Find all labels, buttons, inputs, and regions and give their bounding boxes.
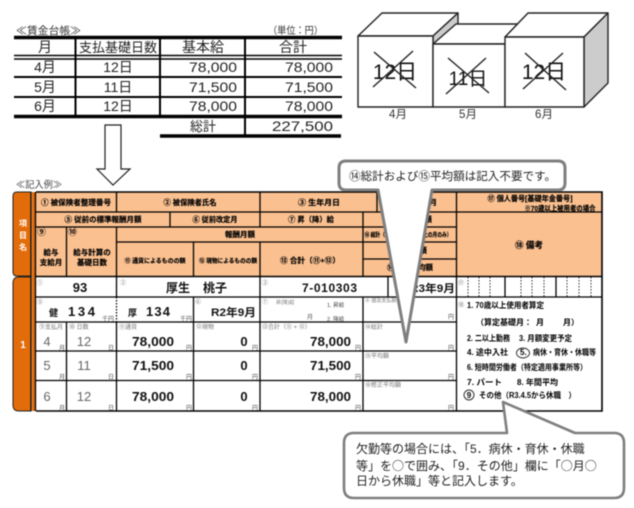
- remarks checklist: 6. 短時間労働者（特定適用事業所等）: [467, 362, 587, 372]
- caption: wage ledger: ≪賃金台帳≫: [16, 24, 81, 37]
- caption: entry example: ≪記入例≫: [16, 179, 62, 191]
- callout: absence instructions: 欠勤等の場合には、「5．病休・育休・休職: [356, 441, 585, 456]
- row values: 71,500: [132, 358, 174, 373]
- header labels: 給与: [44, 247, 59, 257]
- arrow: ledger to form: [97, 125, 130, 185]
- box: May 11 days: 11日: [449, 69, 487, 90]
- remarks checklist: 1. 70歳以上使用者算定: [467, 300, 544, 310]
- row values: 2. 降給: [327, 315, 345, 323]
- header labels: ⑱ 備考: [515, 240, 543, 250]
- wage ledger table: 12日: [103, 59, 133, 75]
- box: April 12 days: [358, 13, 458, 107]
- row values: 円: [355, 345, 361, 352]
- row values: R3年9月: [410, 281, 455, 295]
- header labels: ⑧ 遡及差額: [392, 214, 432, 224]
- header labels: [37, 193, 596, 272]
- header labels: 報酬月額: [225, 229, 255, 239]
- tab: item names: 項: [19, 219, 27, 228]
- header labels: ※70歳以上被用者の場合: [524, 203, 596, 213]
- row values: 0: [240, 389, 248, 404]
- header labels: ⑩: [68, 227, 77, 237]
- row values: ⑮平均額: [365, 352, 389, 360]
- wage ledger table: 11日: [104, 79, 132, 95]
- row values: 厚生: [166, 280, 190, 295]
- stacked day-count boxes: [358, 13, 608, 121]
- row values: 円: [355, 405, 361, 412]
- header labels: ⑬ 合計（⑪+⑫）: [280, 255, 340, 265]
- wage ledger table: 支払基礎日数: [79, 40, 157, 55]
- row values: 円: [252, 405, 258, 412]
- row values: ③: [262, 279, 268, 287]
- tab spine: [32, 192, 35, 411]
- row values: 7-010303: [302, 281, 357, 295]
- row values: 月: [59, 345, 65, 352]
- header labels: ⑥ 従前改定月: [192, 214, 238, 224]
- box month labels: [389, 109, 553, 121]
- row values: R2年9月: [211, 305, 256, 319]
- row values: 71,500: [310, 358, 351, 373]
- wage ledger table: 4月: [34, 59, 56, 75]
- row values: 日: [108, 345, 114, 352]
- row values: 円: [186, 374, 192, 381]
- remarks checklist: 3. 月額変更予定: [519, 333, 572, 343]
- box: April 12 days: 12日: [373, 61, 417, 84]
- row values: [37, 279, 464, 412]
- row values: ⑬合計（⑪ + ⑫）: [262, 323, 311, 331]
- wage ledger table: 71,500: [285, 79, 333, 95]
- form grid lines: [31, 192, 602, 411]
- row values: 5: [43, 358, 51, 373]
- box month labels: 4月: [389, 109, 407, 121]
- row values: 12: [77, 389, 91, 404]
- form header band: [36, 192, 602, 276]
- tab: row number: [13, 277, 31, 411]
- header labels: ⑦ 昇（降）給: [288, 214, 334, 224]
- row values: 78,000: [132, 334, 174, 349]
- row values: 月: [307, 314, 313, 321]
- box: May 11 days: [433, 24, 530, 107]
- header labels: ⑯ 修正平均額: [387, 262, 433, 272]
- row values: 円: [448, 374, 454, 381]
- header labels: ① 被保険者整理番号: [41, 197, 111, 207]
- header labels: 支給月: [40, 257, 62, 267]
- header labels: ② 被保険者氏名: [164, 197, 216, 207]
- header labels: ③ 生年月日: [298, 197, 340, 207]
- row values: 円: [448, 405, 454, 412]
- callout: totals not required: [339, 161, 565, 342]
- wage ledger table: 227,500: [272, 118, 333, 134]
- wage ledger table: 合計: [279, 39, 307, 55]
- row values: 1. 昇給: [327, 301, 345, 309]
- row values: 健: [49, 307, 58, 318]
- callout: absence instructions: 日から休職」等と記入します。: [356, 474, 523, 488]
- row values: 円: [448, 345, 454, 352]
- row values: ⑥: [195, 298, 201, 306]
- remarks checklist: 病休・育休・休職等: [533, 347, 596, 357]
- row values: 昇(降)給: [276, 299, 294, 306]
- row values: 11: [77, 358, 91, 373]
- row values: 134: [146, 304, 171, 319]
- wage ledger table: 基本給: [182, 39, 224, 55]
- box: June 12 days: [505, 13, 608, 107]
- header labels: ⑨: [37, 227, 46, 237]
- tab: row number: 1: [20, 340, 26, 351]
- row values: ⑤: [37, 298, 43, 306]
- row values: ⑪通貨: [119, 323, 137, 331]
- wage ledger table: 総計: [190, 119, 216, 134]
- row values: ⑩ 日数: [69, 323, 89, 331]
- row values: 桃子: [203, 280, 227, 295]
- row values: 4: [43, 334, 51, 349]
- wage ledger table: 71,500: [189, 79, 237, 95]
- row values: 0: [240, 358, 248, 373]
- tab: item names: [13, 192, 31, 276]
- remarks checklist: 9: [467, 391, 472, 400]
- remarks checklist: ⑱: [458, 301, 464, 309]
- row values: ⑰: [458, 279, 464, 287]
- row values: 6: [43, 389, 51, 404]
- wage ledger table: 78,000: [285, 98, 333, 114]
- header labels: ⑭ 総計（一定の基礎日数以上の月のみ）: [364, 231, 452, 239]
- header labels: ⑮ 平均額: [393, 245, 428, 255]
- wage ledger table: 6月: [34, 98, 56, 114]
- row values: ⑫現物: [196, 323, 214, 331]
- remarks checklist: 月: [536, 318, 544, 327]
- form: entry example: [13, 192, 602, 412]
- tab: item names: 目: [19, 231, 27, 240]
- row values: ①: [37, 279, 43, 287]
- row values: ⑯修正平均額: [365, 381, 401, 389]
- box: June 12 days: 12日: [522, 61, 566, 84]
- row values: ⑨支払月: [39, 323, 63, 331]
- remarks checklist: 8. 年間平均: [517, 377, 558, 387]
- row values: 12: [77, 334, 91, 349]
- row values: 円: [448, 314, 454, 321]
- row values: ⑧ 遡及支払額: [365, 297, 396, 304]
- wage ledger table: 78,000: [189, 59, 237, 75]
- row values: 日: [108, 374, 114, 381]
- wage ledger table: 月: [38, 39, 52, 55]
- header labels: ④ 適用年月: [397, 197, 437, 207]
- row values: 円: [186, 345, 192, 352]
- row values: ⑦: [262, 298, 268, 306]
- wage ledger table: 78,000: [285, 59, 333, 75]
- row values: ⑭総計: [365, 323, 383, 331]
- remarks checklist: 4. 途中入社: [467, 347, 508, 357]
- header labels: ⑫ 現物によるものの額: [199, 257, 257, 265]
- row values: 93: [73, 280, 87, 295]
- row values: 日: [108, 405, 114, 412]
- remarks checklist: [458, 300, 596, 400]
- row values: 円: [186, 405, 192, 412]
- row values: 月: [59, 374, 65, 381]
- wage ledger table: 12日: [103, 98, 133, 114]
- header labels: 基礎日数: [77, 257, 107, 267]
- caption: unit: （単位：円）: [268, 24, 323, 37]
- remarks checklist: （算定基礎月：: [476, 317, 532, 327]
- row values: 円: [252, 345, 258, 352]
- tab: item names: 名: [19, 242, 27, 252]
- row values: 78,000: [310, 389, 351, 404]
- row values: ②: [120, 279, 126, 287]
- box month labels: 5月: [459, 109, 477, 121]
- row values: 円: [252, 374, 258, 381]
- header labels: 給与計算の: [73, 247, 111, 257]
- remarks checklist: 月）: [563, 318, 579, 327]
- wage ledger table: 5月: [34, 79, 56, 95]
- row values: 0: [240, 334, 248, 349]
- row values: 円: [355, 374, 361, 381]
- header labels: ⑰ 個人番号[基礎年金番号]: [488, 193, 573, 203]
- row values: 千円: [102, 315, 114, 323]
- callout: totals not required: ⑭総計および⑮平均額は記入不要です。: [349, 169, 556, 183]
- wage ledger table: 78,000: [189, 98, 237, 114]
- row values: 千円: [180, 315, 192, 323]
- callout: absence instructions: [344, 402, 624, 498]
- remarks checklist: 2. 二以上勤務: [467, 333, 510, 343]
- remarks checklist: 7. パート: [467, 378, 502, 387]
- box month labels: 6月: [535, 109, 553, 121]
- header labels: ⑤ 従前の標準報酬月額: [64, 214, 142, 224]
- row values: 78,000: [310, 334, 351, 349]
- row values: 134: [68, 304, 96, 319]
- row values: 月: [59, 405, 65, 412]
- wage ledger table: [14, 38, 342, 136]
- row values: 厚: [128, 308, 137, 318]
- header labels: ⑪ 通貨によるものの額: [124, 257, 186, 265]
- remarks checklist: 5.: [520, 348, 527, 357]
- remarks checklist: その他（R3.4.5から休職 ）: [479, 390, 576, 400]
- row values: 78,000: [132, 389, 174, 404]
- callout: absence instructions: 等」を○で囲み、「9．その他」欄に「○月○: [356, 457, 597, 474]
